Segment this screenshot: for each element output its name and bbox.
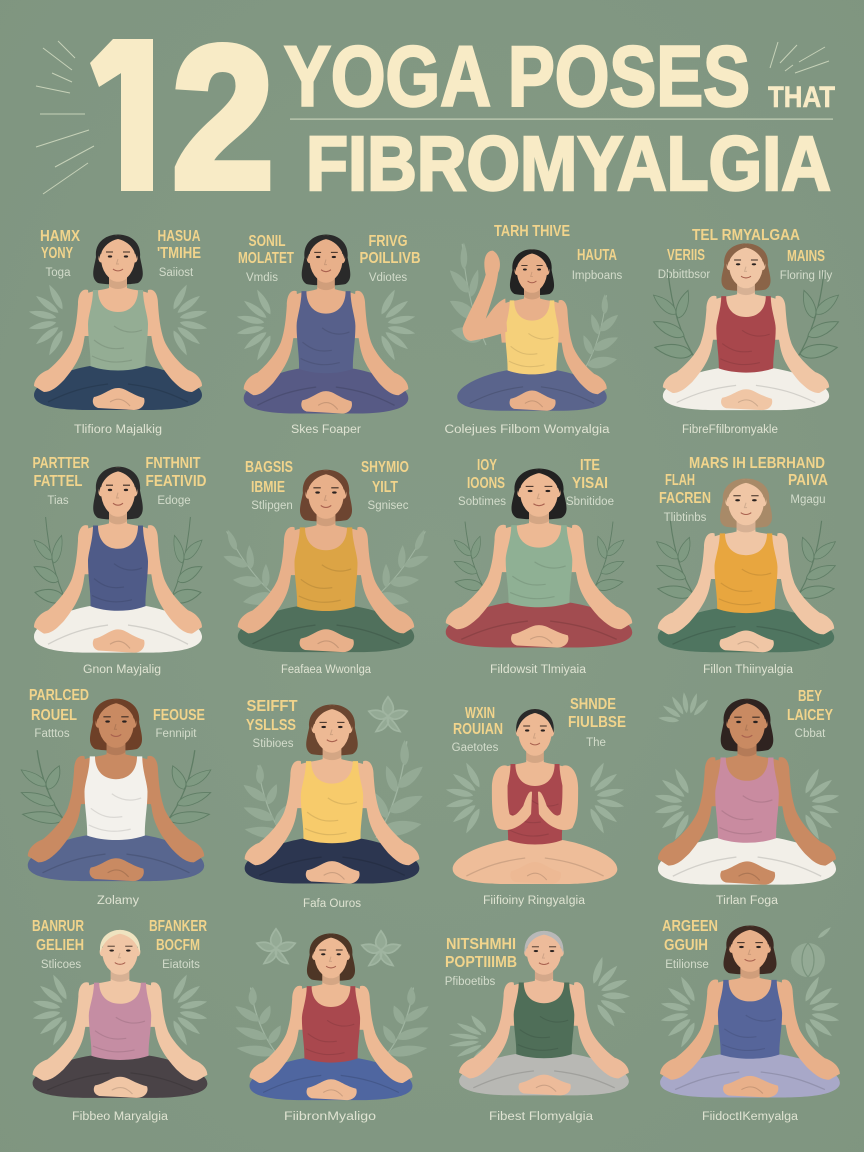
label left: IOY bbox=[477, 457, 497, 474]
panel: pose 9 bbox=[18, 687, 214, 907]
figure seated bbox=[244, 235, 408, 414]
title digit one: 1 bbox=[90, 0, 180, 235]
label left: Stlipgen bbox=[251, 500, 293, 512]
leaves bbox=[212, 520, 440, 615]
label left: GELIEH bbox=[36, 937, 84, 954]
label left: FACREN bbox=[659, 490, 711, 507]
label left bbox=[458, 457, 506, 508]
panel: pose 12 bbox=[652, 684, 840, 907]
panel: pose 16 bbox=[660, 918, 840, 1123]
figure seated bbox=[658, 478, 834, 652]
label left: IBMIE bbox=[251, 479, 285, 496]
sunburst lines left bbox=[36, 41, 94, 194]
label right: Fennipit bbox=[156, 728, 197, 740]
label left bbox=[452, 705, 503, 754]
panel: pose 14 bbox=[232, 929, 432, 1123]
panel: pose 13 bbox=[32, 918, 208, 1123]
figure seated bbox=[658, 699, 836, 885]
label right: HASUA bbox=[158, 228, 201, 245]
label right: Floring Illy bbox=[780, 270, 832, 282]
caption: Tirlan Foga bbox=[716, 895, 779, 907]
label right: BEY bbox=[798, 688, 822, 705]
label left: ARGEEN bbox=[662, 918, 718, 935]
label right: BOCFM bbox=[156, 937, 200, 954]
caption: Colejues Filbom Womyalgia bbox=[444, 424, 610, 436]
label left: GGUIH bbox=[664, 937, 708, 954]
label right: ITE bbox=[580, 457, 600, 474]
leaves bbox=[652, 684, 840, 841]
caption: Zolamy bbox=[97, 895, 139, 907]
label left: Tias bbox=[47, 495, 69, 507]
label right: Impboans bbox=[572, 270, 622, 282]
label left: Stlicoes bbox=[41, 959, 81, 971]
label right bbox=[157, 228, 201, 279]
panel: pose 10 bbox=[240, 697, 426, 910]
label right: FRIVG bbox=[368, 233, 408, 250]
label right: MAINS bbox=[787, 248, 825, 265]
icons: flowers bbox=[257, 929, 400, 966]
panel: pose 7 bbox=[446, 457, 632, 676]
label left: BANRUR bbox=[32, 918, 84, 935]
label left: Dbbittbsor bbox=[658, 269, 710, 281]
label left: WXIN bbox=[465, 705, 495, 722]
label right: POILLIVB bbox=[360, 250, 420, 267]
label left: Etilionse bbox=[665, 959, 709, 971]
leaves bbox=[445, 761, 625, 835]
icon: flower bbox=[369, 697, 407, 732]
caption: FibreFfilbromyakle bbox=[682, 424, 778, 436]
figure seated bbox=[34, 234, 202, 410]
label right: Saiiost bbox=[159, 267, 194, 279]
panel: pose 5 bbox=[31, 455, 206, 676]
figure seated bbox=[238, 470, 414, 652]
label right bbox=[568, 696, 626, 749]
label right: Cbbat bbox=[795, 728, 826, 740]
caption: FiibronMyaligo bbox=[284, 1111, 376, 1123]
label right: Vdiotes bbox=[369, 272, 407, 284]
label right: Mgagu bbox=[790, 494, 826, 506]
label left: Vmdis bbox=[246, 272, 278, 284]
label right bbox=[360, 233, 420, 284]
label left bbox=[246, 698, 298, 750]
title bbox=[36, 39, 835, 194]
leaves bbox=[240, 740, 426, 840]
label left: HAMX bbox=[40, 228, 80, 245]
label left: VERIIS bbox=[667, 247, 705, 264]
icon: fruit bbox=[791, 926, 832, 977]
label right: LAICEY bbox=[787, 707, 833, 724]
label right bbox=[153, 707, 205, 740]
label right: FEOUSE bbox=[153, 707, 205, 724]
label left bbox=[662, 918, 718, 971]
figure seated bbox=[245, 705, 419, 884]
leaves bbox=[236, 288, 416, 362]
label right: The bbox=[586, 737, 606, 749]
label right: YISAI bbox=[572, 475, 608, 492]
title divider bbox=[290, 118, 833, 120]
panel: pose 6 bbox=[212, 459, 440, 676]
caption: Fiifioiny RingyaIgia bbox=[483, 895, 586, 907]
label left bbox=[32, 455, 90, 507]
label left: YONY bbox=[41, 245, 73, 262]
label right: BFANKER bbox=[149, 918, 207, 935]
label top: TARH THIVE bbox=[494, 223, 570, 240]
label right: HAUTA bbox=[577, 247, 617, 264]
figure seated bbox=[250, 933, 412, 1100]
caption: Fillon Thiinyalgia bbox=[703, 664, 794, 676]
label left: Tlibtinbs bbox=[664, 512, 707, 524]
label right: Sbnitidoe bbox=[566, 496, 614, 508]
label left: FATTEL bbox=[34, 473, 83, 490]
caption: Fildowsit Tlmiyaia bbox=[490, 664, 587, 676]
label left: PARTTER bbox=[32, 455, 90, 472]
label right bbox=[780, 248, 832, 282]
label right: SHYMIO bbox=[361, 459, 409, 476]
label left: MOLATET bbox=[238, 250, 294, 267]
panel: pose 11 bbox=[445, 696, 626, 907]
leaves bbox=[32, 973, 208, 1047]
figure seated bbox=[459, 931, 629, 1095]
label left: NITSHMHI bbox=[446, 936, 516, 953]
panel: pose 15 bbox=[445, 931, 636, 1123]
label right: FEATIVID bbox=[146, 473, 206, 490]
label left: YSLLSS bbox=[246, 717, 296, 734]
leaves bbox=[28, 283, 208, 357]
label left: SEIFFT bbox=[246, 698, 298, 715]
label right bbox=[146, 455, 206, 507]
label right: Edoge bbox=[157, 495, 191, 507]
figure seated bbox=[28, 699, 204, 881]
label left: ROUEL bbox=[31, 707, 77, 724]
label left bbox=[659, 472, 711, 524]
label left bbox=[245, 459, 293, 512]
panel: pose 2 bbox=[236, 233, 420, 436]
caption: FiidoctIKemyalga bbox=[702, 1111, 799, 1123]
caption: Feafaea Wwonlga bbox=[281, 664, 372, 676]
figure seated bbox=[33, 930, 207, 1098]
label left: Sobtimes bbox=[458, 496, 506, 508]
caption: Gnon Mayjalig bbox=[83, 664, 161, 676]
label right bbox=[788, 472, 828, 506]
caption: Fafa Ouros bbox=[303, 898, 361, 910]
label left: Toga bbox=[46, 267, 71, 279]
label left: POPTIIIMB bbox=[445, 954, 517, 971]
label arched: TEL RMYALGAA bbox=[692, 227, 800, 244]
label left: IOONS bbox=[467, 475, 505, 492]
caption: Skes Foaper bbox=[291, 424, 361, 436]
figure seated bbox=[663, 243, 829, 410]
label left: Fatttos bbox=[34, 728, 70, 740]
label left bbox=[32, 918, 84, 971]
figure seated bbox=[34, 467, 202, 653]
leaves bbox=[232, 987, 432, 1058]
label right: FIULBSE bbox=[568, 714, 626, 731]
leaves bbox=[31, 517, 205, 605]
label right bbox=[566, 457, 614, 508]
label right bbox=[361, 459, 409, 512]
label left bbox=[40, 228, 80, 279]
label right bbox=[787, 688, 833, 740]
leaves bbox=[452, 522, 626, 592]
panel: pose 8 bbox=[654, 455, 838, 676]
title word that: THAT bbox=[768, 81, 835, 114]
caption: Fibest Flomyalgia bbox=[489, 1111, 594, 1123]
label left: SONIL bbox=[248, 233, 286, 250]
leaves bbox=[660, 975, 840, 1049]
caption: Fibbeo Maryalgia bbox=[72, 1111, 169, 1123]
label right: Eiatoits bbox=[162, 959, 200, 971]
label left bbox=[658, 247, 710, 281]
label top: MARS IH LEBRHAND bbox=[689, 455, 825, 472]
label right bbox=[572, 247, 622, 282]
label left: Pfiboetibs bbox=[445, 976, 495, 988]
label right bbox=[149, 918, 207, 971]
label left bbox=[238, 233, 294, 284]
label right: Sgnisec bbox=[368, 500, 409, 512]
label left: Stibioes bbox=[253, 738, 294, 750]
label left bbox=[445, 936, 517, 988]
leaves bbox=[18, 750, 214, 825]
title digit two: 2 bbox=[172, 4, 274, 230]
label right: SHNDE bbox=[570, 696, 616, 713]
caption: Tlifioro Majalkig bbox=[74, 424, 162, 436]
label left: PARLCED bbox=[29, 687, 89, 704]
label left: BAGSIS bbox=[245, 459, 293, 476]
panel: pose 4 bbox=[650, 227, 842, 436]
label left: Gaetotes bbox=[452, 742, 499, 754]
label right: FNTHNIT bbox=[146, 455, 201, 472]
figure arm raised bbox=[457, 249, 607, 411]
arms to prayer bbox=[492, 765, 578, 830]
figure prayer hands bbox=[453, 709, 617, 884]
leaves bbox=[654, 521, 838, 600]
label right: YILT bbox=[372, 479, 398, 496]
panel: pose 1 bbox=[28, 228, 208, 436]
label left: ROUIAN bbox=[453, 721, 503, 738]
sunburst lines right bbox=[770, 42, 829, 73]
label right: 'TMIHE bbox=[157, 245, 201, 262]
label right: PAIVA bbox=[788, 472, 828, 489]
leaves bbox=[447, 243, 621, 370]
label left bbox=[29, 687, 89, 740]
figure seated bbox=[446, 469, 632, 648]
raised arm bbox=[463, 251, 507, 341]
title line 1: YOGA POSES bbox=[284, 30, 750, 124]
label left: FLAH bbox=[665, 472, 695, 489]
panel: pose 3 bbox=[444, 223, 622, 436]
leaves bbox=[650, 272, 842, 360]
figure seated bbox=[660, 925, 840, 1097]
leaves bbox=[448, 952, 636, 1066]
